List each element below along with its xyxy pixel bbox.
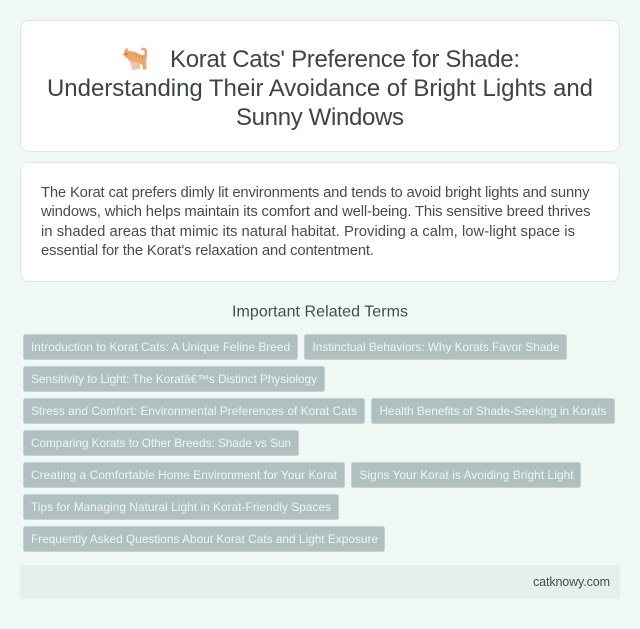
- title text: Korat Cats' Preference for Shade:: [170, 46, 520, 73]
- tag: Sensitivity to Light: The Koratâ€™s Distinct Physiology: [31, 372, 317, 386]
- tag: [372, 398, 614, 424]
- description text: The Korat cat prefers dimly lit environments and tends to avoid bright lights and sunny: [41, 185, 590, 201]
- icon: cat: [123, 48, 147, 70]
- heading: related terms: Important Related Terms: [232, 304, 408, 320]
- tag: Health Benefits of Shade-Seeking in Korats: [380, 404, 607, 418]
- tag: [24, 526, 384, 552]
- tag: [24, 334, 298, 360]
- description text: essential for the Korat's relaxation and contentment.: [41, 243, 374, 259]
- tag: Stress and Comfort: Environmental Preferences of Korat Cats: [31, 404, 357, 418]
- footer source text: catknowy.com: [533, 575, 610, 589]
- tag: Comparing Korats to Other Breeds: Shade vs Sun: [31, 436, 291, 450]
- panel: tags: [24, 334, 614, 552]
- footer: [20, 565, 620, 599]
- tag: Instinctual Behaviors: Why Korats Favor Shade: [312, 340, 560, 354]
- tag: Introduction to Korat Cats: A Unique Feline Breed: [31, 340, 290, 354]
- tag: [24, 430, 298, 456]
- panel: title: Sunny Windows: [236, 104, 404, 131]
- tag: [352, 462, 580, 488]
- tag: Frequently Asked Questions About Korat Cats and Light Exposure: [31, 532, 378, 546]
- tag: [24, 462, 344, 488]
- description text: in shaded areas that mimic its natural habitat. Providing a calm, low-light space is: [41, 224, 575, 240]
- panel: title: Understanding Their Avoidance of Bright Lights and: [47, 75, 593, 102]
- panel: title: [20, 20, 620, 152]
- tag: [304, 334, 566, 360]
- tag: Signs Your Korat is Avoiding Bright Light: [360, 468, 574, 482]
- tag: [24, 398, 364, 424]
- tag: [24, 366, 324, 392]
- tag: Creating a Comfortable Home Environment for Your Korat: [31, 468, 338, 482]
- description text: windows, which helps maintain its comfort and well-being. This sensitive breed thrives: [40, 204, 590, 220]
- tag: Tips for Managing Natural Light in Korat-Friendly Spaces: [31, 500, 331, 514]
- description text: [40, 185, 590, 259]
- panel: description: [20, 162, 620, 282]
- tag: [24, 494, 338, 520]
